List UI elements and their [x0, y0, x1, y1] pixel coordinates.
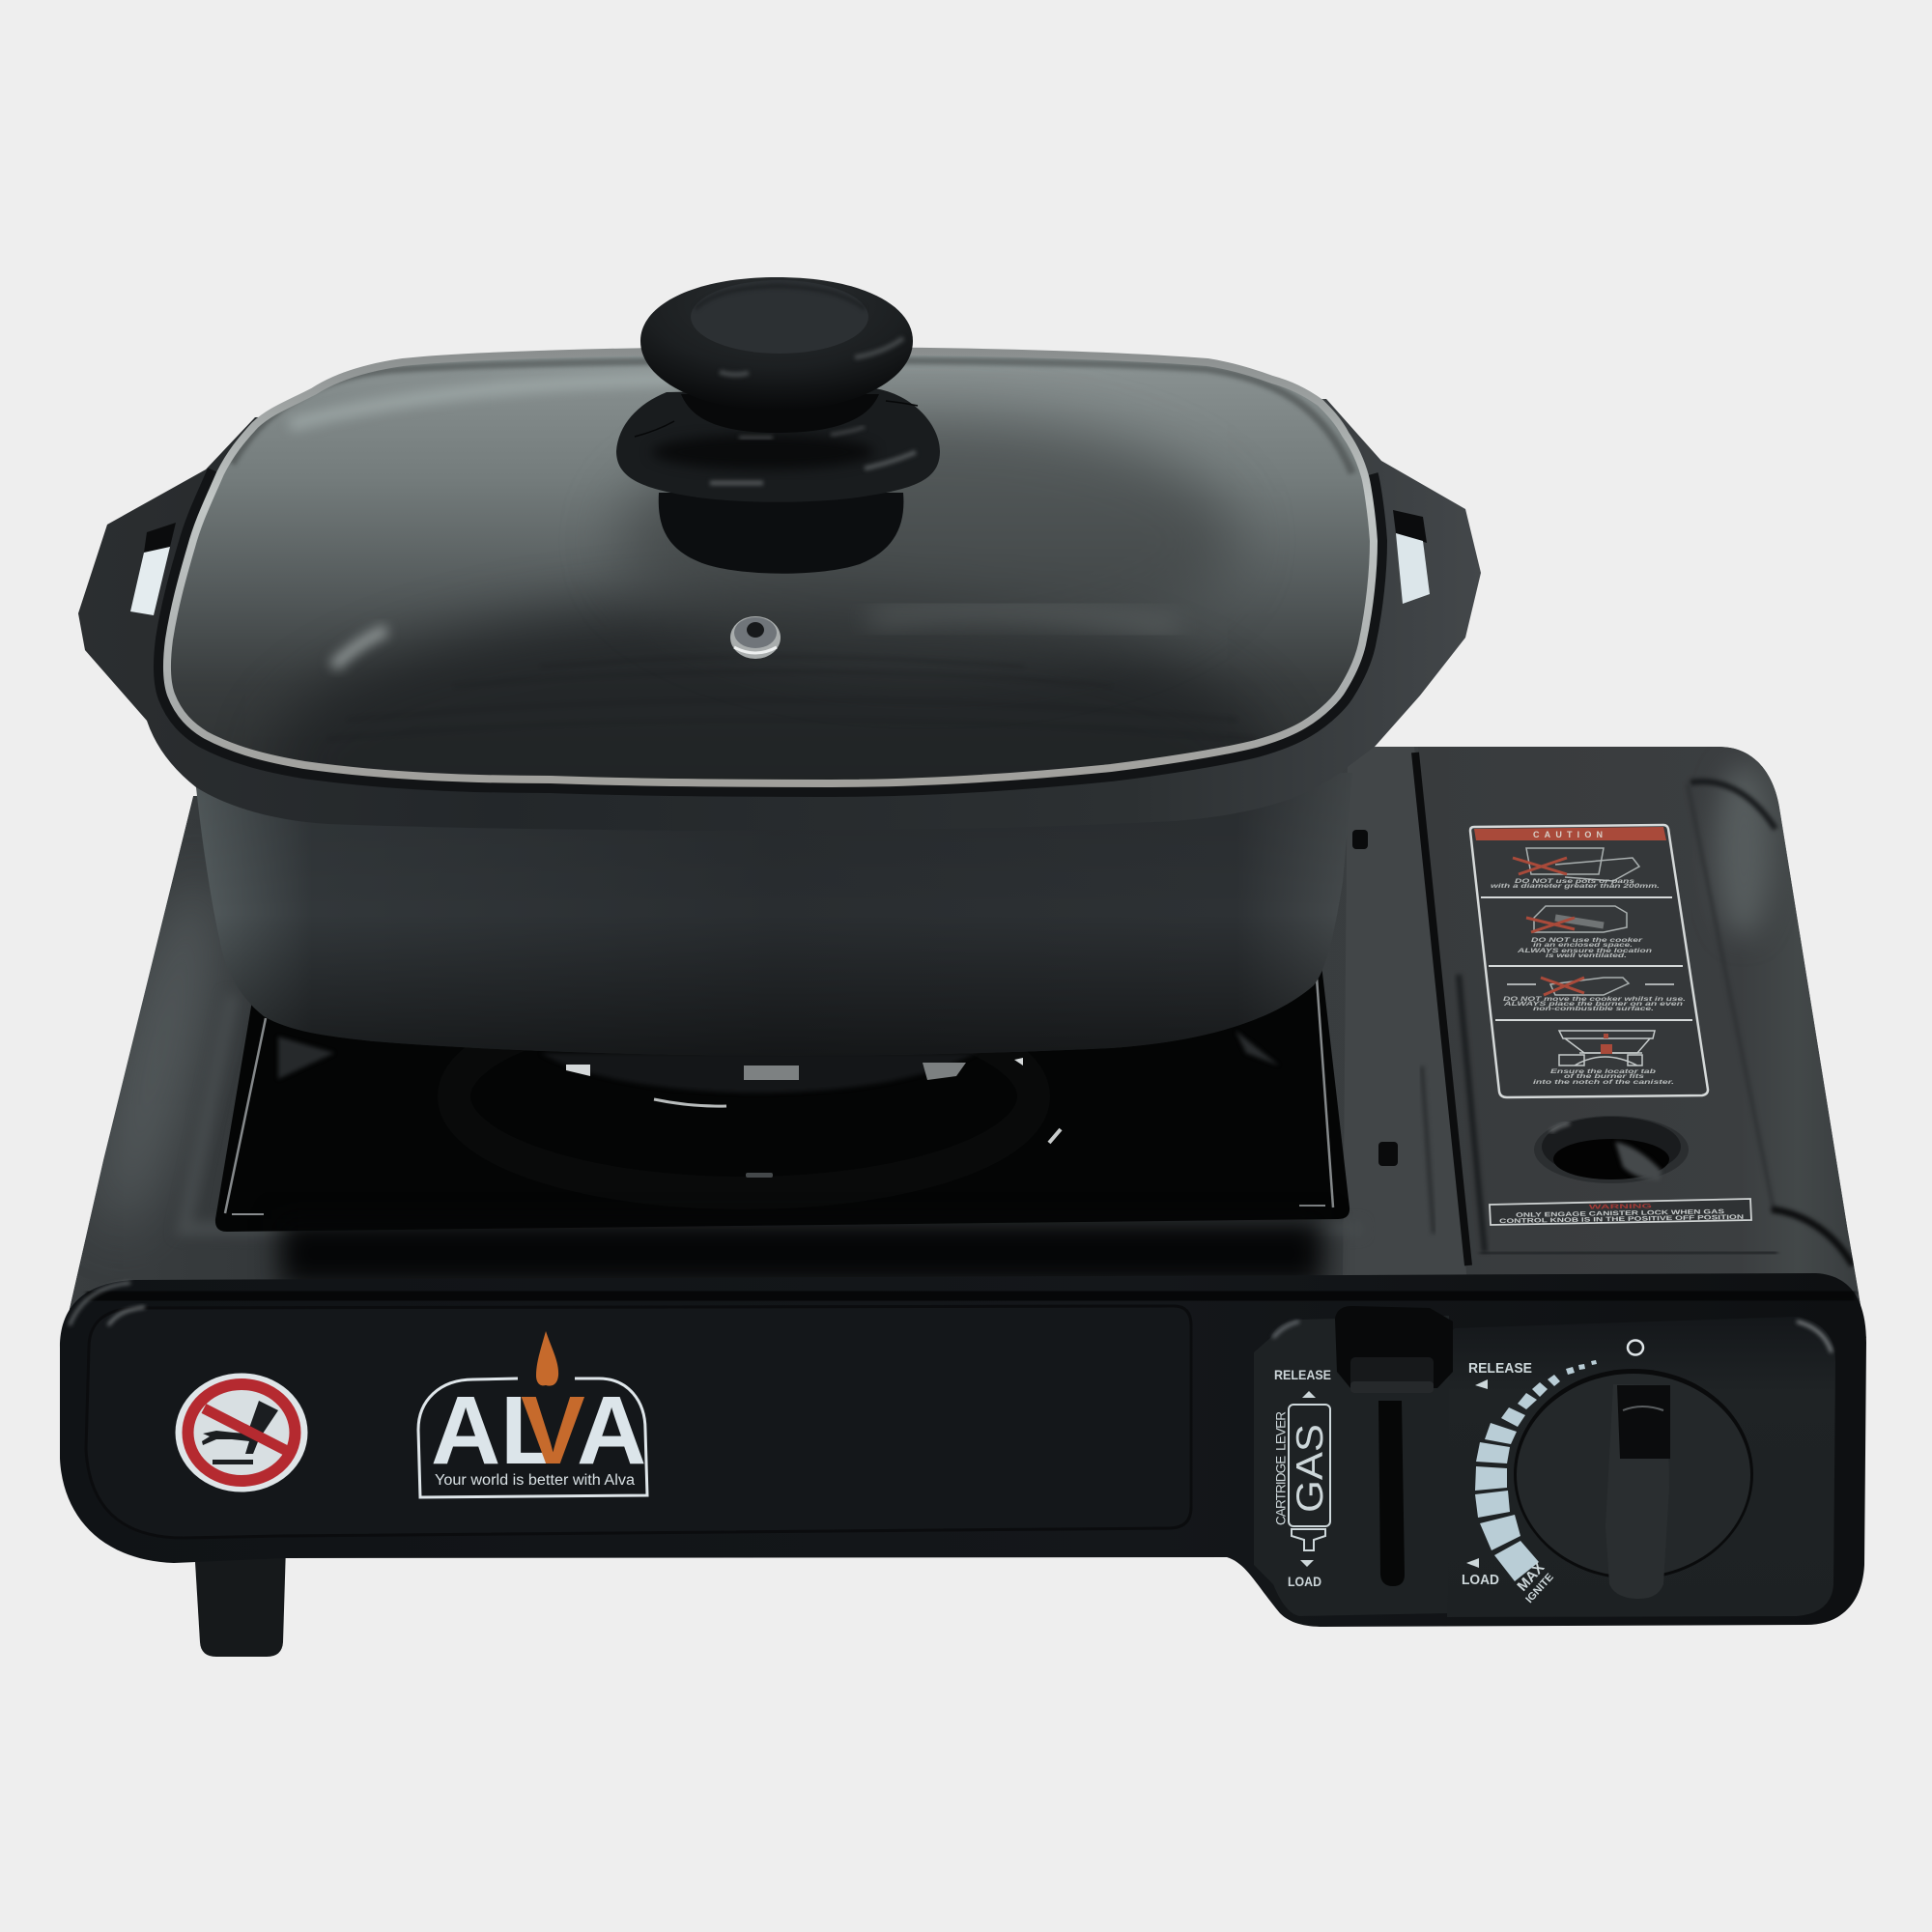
lever panel: [1254, 1316, 1449, 1616]
burner ring: [454, 1000, 1034, 1193]
label: cartridge lever: CARTRIDGE LEVER: [1273, 1411, 1289, 1525]
right handle opening: [1393, 510, 1427, 543]
label: release lever: RELEASE: [1274, 1367, 1331, 1382]
pot interior shade: [278, 582, 1265, 780]
caution text: DO NOT move the cooker whilst in use.: [1503, 997, 1687, 1003]
caution text: ALWAYS ensure the location: [1516, 949, 1653, 954]
lip and handles: [78, 399, 1481, 831]
gas cartridge icon: [1289, 1405, 1330, 1550]
right handle window: [1396, 533, 1430, 604]
slot: [1378, 1142, 1398, 1166]
stove front body: [60, 1273, 1866, 1627]
logo wordmark: V: [521, 1377, 585, 1485]
label: GAS: GAS: [1290, 1424, 1331, 1513]
canister inspection hole: [1534, 1116, 1689, 1183]
caution text: DO NOT use the cooker: [1531, 938, 1643, 944]
caution text: non-combustible surface.: [1533, 1007, 1655, 1012]
burner cavity: [215, 956, 1350, 1232]
burner highlights: [566, 1065, 590, 1076]
base shading: [652, 435, 874, 469]
knob neck: [681, 394, 879, 433]
stove: portable gas cooker: [60, 747, 1866, 1657]
canister warning label: [1490, 1199, 1751, 1225]
slot: [1352, 830, 1368, 849]
logo frame: [418, 1378, 647, 1497]
logo wordmark: L: [500, 1377, 559, 1485]
logo tagline: Your world is better with Alva: [435, 1472, 635, 1489]
icon: oversized pot warning: [1513, 848, 1639, 881]
cartridge lever: [1335, 1306, 1453, 1586]
label: release dial: RELEASE: [1468, 1360, 1532, 1377]
knob top: [640, 277, 913, 411]
caution text: DO NOT use pots or pans: [1515, 879, 1635, 885]
shadow band in front of burner: [280, 1219, 1323, 1287]
logo wordmark: A: [577, 1377, 646, 1485]
cavity recess sheen: [184, 995, 1362, 1229]
caution text: [1491, 879, 1687, 1086]
steam vent: [730, 616, 781, 659]
caution text: Ensure the locator tab: [1550, 1069, 1657, 1075]
glass lid: [171, 355, 1370, 780]
left edge sheen: [93, 882, 230, 1223]
strip between burner and side panel: [1343, 747, 1468, 1275]
warning sticker: do not touch: [176, 1374, 307, 1492]
inner wall highlight: [333, 630, 386, 667]
top-left sheen: [290, 379, 676, 425]
pot with glass lid: [78, 277, 1481, 1056]
burner head: [541, 1053, 976, 1093]
hand icon: [202, 1401, 278, 1464]
caution text: into the notch of the canister.: [1533, 1080, 1675, 1086]
black top band: [87, 1293, 1855, 1299]
left handle opening: [144, 523, 176, 553]
icon: do not move warning: [1507, 978, 1674, 995]
knob base: [616, 388, 940, 502]
dial handle: [1605, 1384, 1669, 1599]
icon: enclosed space warning: [1526, 906, 1627, 932]
caution label: [1470, 825, 1708, 1097]
strip rib: [1422, 1066, 1434, 1234]
lever slot: [1378, 1401, 1405, 1586]
caution text: in an enclosed space.: [1533, 943, 1634, 949]
caution text: is well ventilated.: [1546, 953, 1628, 959]
base highlights: [710, 452, 916, 483]
label: max: MAX: [1514, 1560, 1548, 1595]
caution header: [1474, 827, 1666, 840]
Alva logo: [418, 1331, 647, 1497]
gloss top highlight: [70, 1283, 130, 1325]
lid knob: [616, 277, 940, 502]
logo flame: [536, 1331, 558, 1386]
caution text: with a diameter greater than 200mm.: [1491, 884, 1661, 890]
canister warning label: ONLY ENGAGE CANISTER LOCK WHEN GAS: [1516, 1208, 1725, 1219]
knob flat disc: [691, 280, 868, 354]
inset panel: [86, 1306, 1191, 1538]
caution title: CAUTION: [1533, 830, 1603, 839]
caution text: of the burner fits: [1564, 1074, 1645, 1080]
right side panel top: [1418, 747, 1864, 1294]
arrow left: [1475, 1379, 1488, 1389]
inner dark band: [232, 360, 1352, 473]
canister warning label: CONTROL KNOB IS IN THE POSITIVE OFF POSITION: [1499, 1214, 1745, 1225]
panel corner sheen: [1715, 763, 1773, 937]
arrow down: [1300, 1560, 1314, 1567]
flame scale: [1475, 1360, 1597, 1581]
base seam left: [635, 421, 674, 437]
pan support left: [278, 1037, 334, 1079]
lid rim: [167, 351, 1374, 783]
control dial: [1514, 1369, 1753, 1599]
label: load dial: LOAD: [1462, 1573, 1499, 1588]
base seam right: [886, 401, 918, 406]
logo wordmark: A: [431, 1377, 500, 1485]
centre shade: [618, 415, 1236, 667]
dial panel: [1447, 1317, 1835, 1617]
ripple lines: [328, 657, 1256, 739]
canister warning label: WARNING: [1589, 1203, 1652, 1211]
arrow up: [1302, 1391, 1316, 1398]
control panel: [1254, 1306, 1835, 1617]
icon: locator tab: [1559, 1031, 1655, 1065]
label: ignite: IGNITE: [1523, 1572, 1556, 1605]
knob highlights: [720, 338, 903, 375]
knob reflection: [659, 493, 903, 574]
stove top plate: [63, 747, 1866, 1338]
arrow left: [1466, 1558, 1479, 1568]
pan support right: [1236, 1031, 1279, 1065]
label: load lever: LOAD: [1288, 1575, 1321, 1589]
product photo illustration: [60, 277, 1866, 1657]
left handle window: [130, 547, 170, 615]
caution text: ALWAYS place the burner on an even: [1502, 1002, 1684, 1008]
pot body: [196, 773, 1352, 1056]
dark band outside rim: [167, 473, 1374, 783]
panel divider groove: [1415, 753, 1468, 1265]
off marker: [1628, 1341, 1643, 1354]
stove foot: [194, 1546, 286, 1657]
